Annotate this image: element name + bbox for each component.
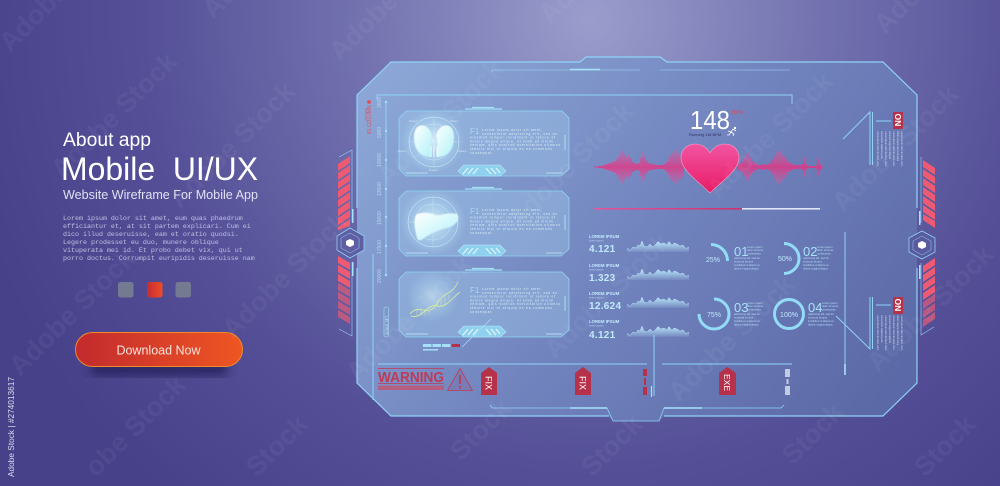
donut 25 percent: eiusmod tempor	[734, 260, 753, 264]
text block: F1	[470, 207, 480, 216]
text block: F1	[470, 286, 480, 295]
watermarks: Adobe Stock	[371, 53, 510, 191]
text block: F1	[470, 127, 480, 136]
text block: Lorem ipsum dolor sit amet,	[482, 208, 542, 212]
donut 100 percent: 04	[808, 300, 822, 315]
stat 1	[589, 234, 689, 255]
right notes: bottom: Lorem ipsum dolor sit amet, cons	[884, 315, 887, 351]
donut 25 percent: incididunt ut labore et	[734, 263, 760, 267]
body text: porro doctus. Corrumpit euripidis deseruisse nam	[63, 255, 255, 263]
icon: dna	[407, 270, 460, 322]
stats list	[589, 234, 689, 341]
icon: liver	[400, 189, 466, 255]
text block: veniam, quis nostrud exercitation ullamco	[470, 223, 560, 227]
scale axis: 20000	[377, 269, 383, 283]
progress bar	[594, 208, 820, 210]
subtitle: Website Wireframe For Mobile App	[63, 188, 258, 202]
right notes: bottom: Lorem ipsum dolor sit amet, cons	[876, 315, 879, 351]
text block: laboris nisi ut aliquip ex ea commodo	[470, 147, 552, 151]
right notes: top: ON	[893, 114, 903, 126]
donut 25 percent: dolore magna aliqua.	[734, 266, 759, 270]
heading: about app: About app	[63, 130, 151, 151]
scale axis: SCALE SET	[385, 315, 389, 335]
donut 75 percent: consectetur	[747, 308, 761, 312]
text block	[470, 127, 560, 155]
watermarks: Adobe Stock	[861, 239, 1000, 377]
stat 2	[589, 263, 689, 284]
scale axis: 3000	[377, 97, 383, 108]
icon: kidneys: Kidneys	[409, 120, 418, 123]
watermarks: Adobe Stock	[501, 96, 640, 234]
tag: thin red marker	[643, 369, 647, 395]
donut 75 percent	[699, 299, 764, 329]
text block: consectetur adipiscing elit, sed do	[482, 212, 557, 216]
panel: liver	[399, 188, 569, 256]
text block: Lorem ipsum dolor sit amet,	[482, 128, 542, 132]
scale axis: 10000	[377, 153, 383, 167]
tag: fix 2	[575, 367, 591, 395]
donut 50 percent: 02	[803, 244, 817, 259]
text block: dolore magna aliqua. Ut enim ad minim	[470, 298, 553, 302]
tag: fix 1	[481, 367, 497, 395]
tag: grey marker	[785, 369, 790, 395]
right notes: bottom	[836, 297, 903, 351]
donut 100 percent: 100%	[780, 312, 798, 319]
right stripes	[919, 157, 935, 335]
watermarks: Stock	[776, 396, 850, 470]
bpm readout: 148	[690, 105, 730, 135]
donut 50 percent: 50%	[778, 256, 792, 263]
donut 50 percent: incididunt ut labore et	[803, 263, 829, 267]
watermarks: Adobe Stock	[701, 66, 840, 204]
donut 75 percent: adipiscing elit, sed do	[734, 312, 760, 316]
icon: kidneys: Kidneys	[398, 150, 407, 153]
right notes: bottom: eiusmod tempor incididunt	[888, 315, 891, 343]
icon: kidneys	[398, 109, 467, 173]
watermarks: Adobe Stock	[216, 206, 355, 344]
body text	[63, 215, 255, 263]
right notes: top	[843, 112, 903, 167]
donut 50 percent: eiusmod tempor	[803, 260, 822, 264]
donut 50 percent	[778, 244, 834, 274]
stat 3: lorem ipsum	[589, 296, 604, 300]
warning label: WARNING	[378, 369, 444, 386]
donut 50 percent: adipiscing elit, sed do	[803, 256, 829, 260]
icon: warning triangle	[448, 368, 472, 390]
donut 50 percent: dolor sit amet,	[817, 248, 834, 252]
right notes: top: consectetur adipiscing elit	[880, 131, 883, 159]
watermarks: Stock	[575, 408, 649, 482]
stat 2: lorem ipsum	[589, 268, 604, 272]
watermarks: Adobe Stock	[163, 76, 302, 214]
donut 25 percent: adipiscing elit, sed do	[734, 256, 760, 260]
icon: kidneys: Kidneys	[458, 150, 467, 153]
panel: kidneys	[398, 108, 569, 176]
donut 100 percent: adipiscing elit, sed do	[808, 312, 834, 316]
donut 25 percent: 01	[734, 244, 748, 259]
scale axis: 15000	[377, 211, 383, 225]
donut 75 percent: eiusmod tempor	[734, 316, 753, 320]
text block: laboris nisi ut aliquip ex ea commodo	[470, 227, 552, 231]
panel: dna	[399, 268, 569, 337]
tag: fix 1: FIX	[484, 376, 494, 390]
tag: fix 2: FIX	[578, 376, 588, 390]
text block: consectetur adipiscing elit, sed do	[482, 291, 557, 295]
right notes: top: dolore magna aliqua ut enim	[896, 131, 899, 161]
donut 100 percent	[774, 300, 839, 328]
text block: consequat.	[470, 310, 493, 314]
stat 1: LOREM IPSUM	[589, 234, 620, 239]
body text: Lorem ipsum dolor sit amet, eum quas phaedrum	[63, 215, 243, 223]
stat 3: 12.624	[589, 301, 622, 312]
donut 25 percent: 25%	[706, 257, 720, 264]
text block: eiusmod tempor incididunt ut labore et	[470, 216, 555, 220]
body text: vituperata mei id. Et probo debet vix, qui ut	[63, 247, 243, 255]
stat 4: LOREM IPSUM	[589, 319, 620, 324]
text block: dolore magna aliqua. Ut enim ad minim	[470, 139, 553, 143]
watermarks: Stock	[908, 408, 982, 482]
watermarks: Adobe Stock	[3, 243, 142, 381]
text block: laboris nisi ut aliquip ex ea commodo	[470, 306, 552, 310]
right notes: top: Lorem ipsum dolor sit amet, cons	[892, 131, 895, 167]
body text: Legere prodesset eu duo, munere oblique	[63, 239, 219, 247]
text block: Lorem ipsum dolor sit amet,	[482, 287, 542, 291]
stat 1: 4.121	[589, 244, 616, 255]
donut 100 percent: eiusmod tempor	[808, 316, 827, 320]
donut 75 percent: dolore magna aliqua.	[734, 322, 759, 326]
download button	[76, 332, 242, 376]
download button: Download Now	[116, 344, 202, 358]
body text: efficiantur et, at sit partem explicari. Cum ei	[63, 223, 251, 231]
icon: kidneys: Kidneys	[450, 120, 459, 123]
body text: dico illud deseruisse, eam et oratio quodsi.	[63, 231, 239, 239]
watermarks: Adobe Stock	[826, 79, 965, 217]
scale axis: 5000	[377, 127, 383, 138]
right notes: top: eiusmod tempor incididunt	[888, 131, 891, 159]
tag: exe: EXE	[722, 374, 732, 391]
donut 25 percent	[706, 244, 764, 270]
heart	[681, 144, 739, 193]
donut 100 percent: incididunt ut labore et	[808, 319, 834, 323]
donut 75 percent: dolor sit amet,	[747, 304, 764, 308]
right notes: bottom: dolore magna aliqua ut enim	[896, 315, 899, 345]
text block: veniam, quis nostrud exercitation ullamco	[470, 143, 560, 147]
text block: eiusmod tempor incididunt ut labore et	[470, 136, 555, 140]
donut 100 percent: Lorem ipsum	[822, 301, 838, 305]
donut 75 percent: incididunt ut labore et	[734, 319, 760, 323]
text block: eiusmod tempor incididunt ut labore et	[470, 295, 555, 299]
stat 3	[589, 291, 689, 312]
left stripes	[338, 150, 354, 336]
text block	[470, 286, 560, 314]
right hexagon	[909, 231, 935, 259]
icon: runner	[727, 127, 736, 136]
watermarks: Adobe Stock	[45, 46, 184, 184]
donut 75 percent: 03	[734, 300, 748, 315]
watermarks: Adobe Stock	[340, 249, 479, 387]
stat 4: lorem ipsum	[589, 324, 604, 328]
bpm readout: BPM	[732, 110, 743, 116]
donut 100 percent: dolor sit amet,	[822, 304, 839, 308]
watermarks: Stock	[444, 392, 518, 466]
title: Mobile UI/UX	[61, 151, 258, 187]
tag: exe	[719, 367, 736, 395]
donut 75 percent: 75%	[707, 312, 721, 319]
right notes: bottom: Lorem ipsum dolor sit amet, cons	[892, 315, 895, 351]
right notes: bottom: consectetur adipiscing elit	[880, 315, 883, 343]
right notes: bottom: ON	[893, 298, 903, 311]
text block: consequat.	[470, 231, 493, 235]
icon: kidneys: Kidneys	[429, 169, 438, 172]
text block: dolore magna aliqua. Ut enim ad minim	[470, 219, 553, 223]
donut 100 percent: consectetur	[822, 308, 836, 312]
donut 50 percent: Lorem ipsum	[817, 245, 833, 249]
right notes: top: Lorem ipsum dolor sit amet, cons	[876, 131, 879, 167]
main hud frame	[357, 57, 917, 421]
right notes: top: Lorem ipsum dolor sit amet, cons	[884, 131, 887, 167]
scale axis: 17500	[377, 240, 383, 254]
donut 75 percent: Lorem ipsum	[747, 301, 763, 305]
red marker: 81 COLUMN	[367, 105, 373, 134]
scale axis: 13500	[377, 182, 383, 196]
watermarks: Adobe Stock	[538, 226, 677, 364]
stat 4	[589, 319, 689, 341]
stock id: Adobe Stock | #274013617	[6, 377, 16, 477]
stat 4: 4.121	[589, 330, 616, 341]
text block	[470, 207, 560, 235]
right notes: top: Lorem ipsum dolor sit amet, cons	[900, 131, 903, 167]
right notes: bottom: Lorem ipsum dolor sit amet, cons	[900, 315, 903, 351]
stat 1: lorem ipsum	[589, 238, 604, 242]
left text column	[61, 130, 258, 263]
scale axis	[377, 97, 389, 337]
bpm readout: Running 118 BPM	[689, 132, 721, 137]
stat 3: LOREM IPSUM	[589, 291, 620, 296]
text block: veniam, quis nostrud exercitation ullamco	[470, 302, 560, 306]
donut 25 percent: consectetur	[747, 252, 761, 256]
donut 25 percent: Lorem ipsum	[747, 245, 763, 249]
text block: consectetur adipiscing elit, sed do	[482, 132, 557, 136]
stat 2: 1.323	[589, 273, 616, 284]
donut 25 percent: dolor sit amet,	[747, 248, 764, 252]
donut 50 percent: consectetur	[817, 252, 831, 256]
stat 2: LOREM IPSUM	[589, 263, 620, 268]
pagination squares	[118, 282, 191, 298]
donut 100 percent: dolore magna aliqua.	[808, 322, 833, 326]
left hexagon	[337, 228, 364, 258]
donut 50 percent: dolore magna aliqua.	[803, 266, 828, 270]
watermarks: Adobe Stock	[662, 269, 801, 407]
watermarks: Stock	[240, 408, 314, 482]
watermarks: obe Stock	[79, 369, 192, 482]
status bars with pointer	[423, 319, 491, 350]
heartbeat waveform	[595, 149, 822, 185]
text block: consequat.	[470, 151, 493, 155]
